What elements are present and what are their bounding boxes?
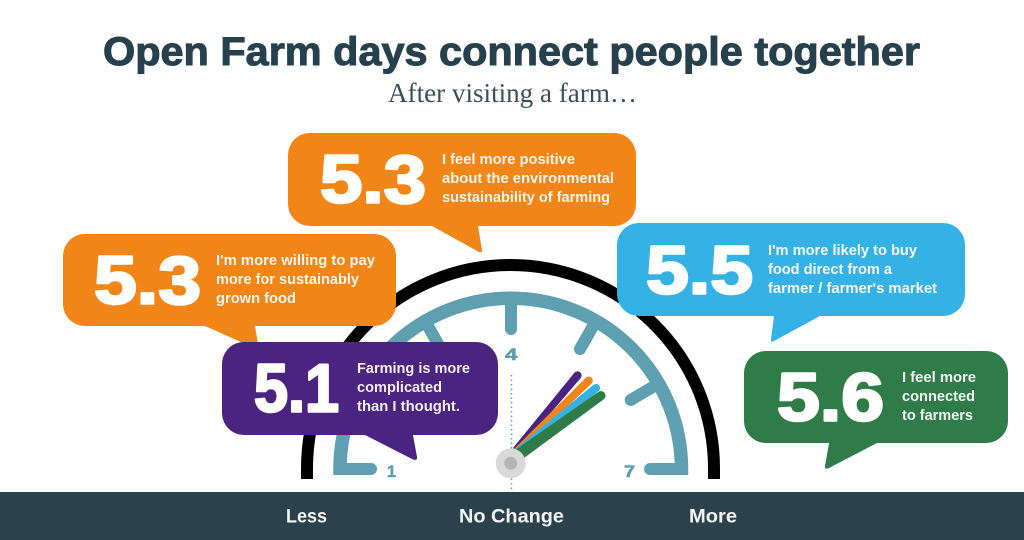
- value 5.5: 5.5: [646, 232, 753, 308]
- statement text: grown food: [216, 291, 296, 307]
- needle hub: [496, 448, 526, 478]
- value 5.6: 5.6: [777, 360, 884, 436]
- value 5.3: 5.3: [94, 242, 201, 318]
- statement text: complicated: [357, 380, 442, 396]
- scale number 7: 7: [624, 462, 635, 481]
- statement text: connected: [902, 389, 975, 405]
- subtitle: After visiting a farm…: [388, 78, 637, 108]
- title: Open Farm days connect people together: [103, 30, 920, 74]
- gauge teal scale with ticks: [336, 298, 686, 475]
- statement text: I feel more: [902, 370, 976, 386]
- needle: purple 5.1: [513, 371, 582, 452]
- no-change dotted line: [510, 375, 512, 490]
- callout: willing to pay 5.3: [63, 234, 396, 350]
- statement text: food direct from a: [768, 262, 893, 278]
- statement text: I feel more positive: [442, 152, 575, 168]
- callout: sustainability 5.3: [288, 133, 636, 252]
- needle: blue 5.5: [514, 384, 600, 455]
- scale number 1: 1: [387, 462, 396, 481]
- statement text: [357, 361, 470, 415]
- footer label: less: Less: [286, 506, 327, 528]
- scale number 4: 4: [505, 345, 518, 364]
- callout: connected 5.6: [744, 351, 1008, 469]
- statement text: sustainability of farming: [442, 190, 610, 206]
- statement text: [768, 243, 937, 297]
- footer bar: [0, 492, 1024, 540]
- gauge outer black arc: [307, 265, 714, 479]
- statement text: more for sustainably: [216, 272, 360, 288]
- statement text: than I thought.: [357, 399, 460, 415]
- statement text: about the environmental: [442, 171, 614, 187]
- needle: green 5.6: [515, 391, 606, 458]
- statement text: I'm more likely to buy: [768, 243, 918, 259]
- footer label: no change: No Change: [459, 506, 564, 528]
- gauge: [307, 265, 714, 490]
- footer label: more: More: [689, 506, 737, 528]
- value 5.1: 5.1: [254, 350, 339, 426]
- statement text: [902, 370, 976, 424]
- callout: complicated 5.1: [222, 342, 498, 460]
- value 5.3: 5.3: [320, 142, 426, 218]
- statement text: [216, 253, 376, 307]
- statement text: to farmers: [902, 408, 973, 424]
- statement text: I'm more willing to pay: [216, 253, 376, 269]
- statement text: [442, 152, 614, 206]
- callout: buy direct 5.5: [617, 223, 965, 342]
- statement text: farmer / farmer's market: [768, 281, 937, 297]
- needle: orange 5.3: [514, 377, 593, 453]
- statement text: Farming is more: [357, 361, 470, 377]
